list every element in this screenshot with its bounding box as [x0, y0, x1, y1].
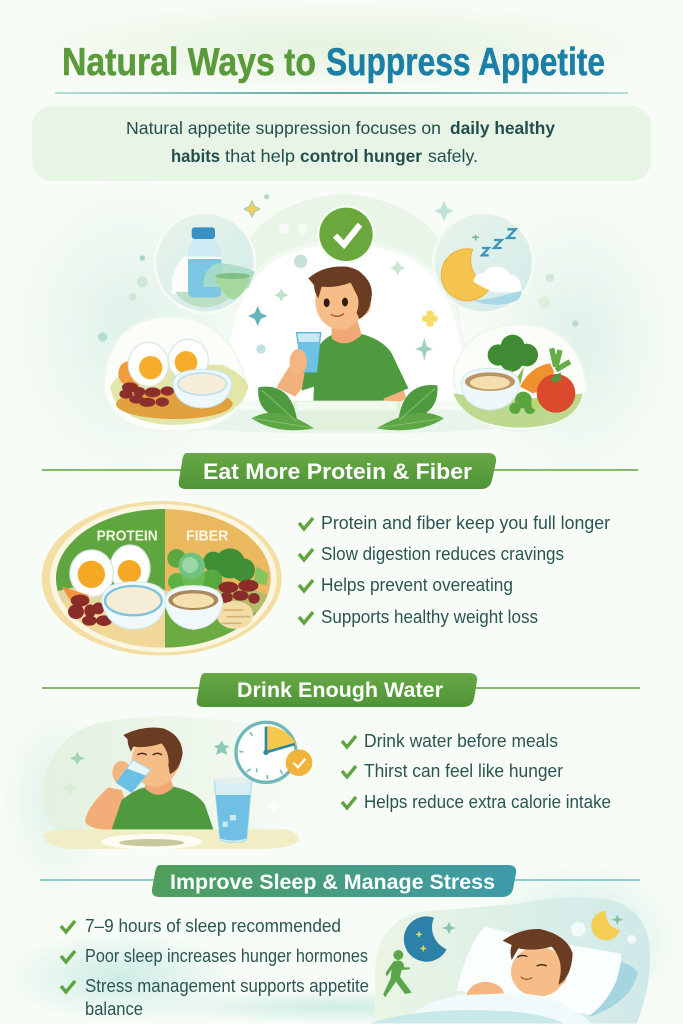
intro text: safely.	[428, 146, 478, 166]
intro text	[126, 118, 555, 166]
intro text: control hunger	[300, 146, 422, 166]
bowls	[102, 582, 223, 629]
yellow moon	[571, 911, 636, 944]
section heading: Drink Enough Water: Drink Enough Water	[237, 679, 443, 702]
protein and fiber plate	[42, 501, 282, 656]
intro text: that help	[225, 146, 295, 166]
top-right circle: moon and sleep	[433, 213, 533, 313]
item 1: Protein and fiber keep you full longer	[321, 513, 610, 533]
clock	[236, 722, 297, 782]
bottom-right bowl: vegetables	[453, 324, 587, 431]
sparkles	[228, 201, 453, 361]
item 4: Supports healthy weight loss	[321, 607, 538, 627]
clock check badge	[286, 749, 312, 776]
hero illustration	[98, 194, 587, 433]
item 2: Slow digestion reduces cravings	[321, 544, 564, 564]
section heading: Improve Sleep & Manage Stress: Improve Sleep & Manage Stress	[170, 871, 495, 894]
boy	[85, 727, 213, 830]
intro text: daily healthy	[450, 118, 555, 138]
glass of water	[214, 777, 252, 842]
person drinking with clock and glass	[43, 717, 312, 849]
pillow	[457, 927, 638, 1017]
plate labels	[97, 528, 229, 544]
intro text: habits	[171, 146, 220, 166]
item 1: Drink water before meals	[364, 731, 558, 751]
beans left	[68, 595, 112, 626]
plate labels: PROTEIN	[97, 528, 158, 544]
blanket	[370, 982, 592, 1023]
item 2: Thirst can feel like hunger	[364, 761, 563, 781]
item 3: Helps prevent overeating	[321, 575, 513, 595]
plate labels: FIBER	[186, 528, 229, 544]
section heading: Improve Sleep & Manage Stress	[40, 865, 640, 897]
table	[43, 829, 299, 849]
person drinking water	[277, 266, 408, 401]
blue moon	[404, 916, 447, 962]
top-left circle: water bottle	[155, 213, 255, 313]
check badge	[317, 205, 375, 263]
eggs	[62, 545, 150, 603]
list: protein and fiber	[299, 513, 610, 627]
title	[62, 41, 605, 84]
leaves	[252, 385, 444, 430]
beans and seeds right	[217, 580, 260, 629]
title: Natural Ways to	[62, 41, 316, 84]
item 3: Stress management supports appetite	[85, 976, 369, 996]
item 3: Helps reduce extra calorie intake	[364, 792, 611, 812]
section heading: Drink Enough Water	[42, 673, 640, 707]
intro text: Natural appetite suppression focuses on	[126, 118, 441, 138]
decorative dots	[98, 194, 578, 354]
sleeping boy	[503, 929, 573, 997]
walking figure	[383, 950, 412, 997]
section heading: Eat More Protein & Fiber	[42, 453, 638, 489]
list: sleep and stress	[61, 916, 369, 1019]
item 3	[61, 976, 369, 1019]
sleeping person illustration	[370, 897, 650, 1023]
greens	[167, 548, 268, 591]
title: Suppress Appetite	[326, 41, 605, 84]
section heading: Eat More Protein & Fiber: Eat More Protein & Fiber	[203, 459, 472, 484]
item 2: Poor sleep increases hunger hormones	[85, 946, 368, 966]
intro panel	[32, 106, 651, 181]
list: water	[342, 731, 611, 812]
item 3: balance	[85, 999, 143, 1019]
item 1: 7–9 hours of sleep recommended	[85, 916, 341, 936]
bottom-left plate: eggs and beans	[103, 317, 248, 432]
